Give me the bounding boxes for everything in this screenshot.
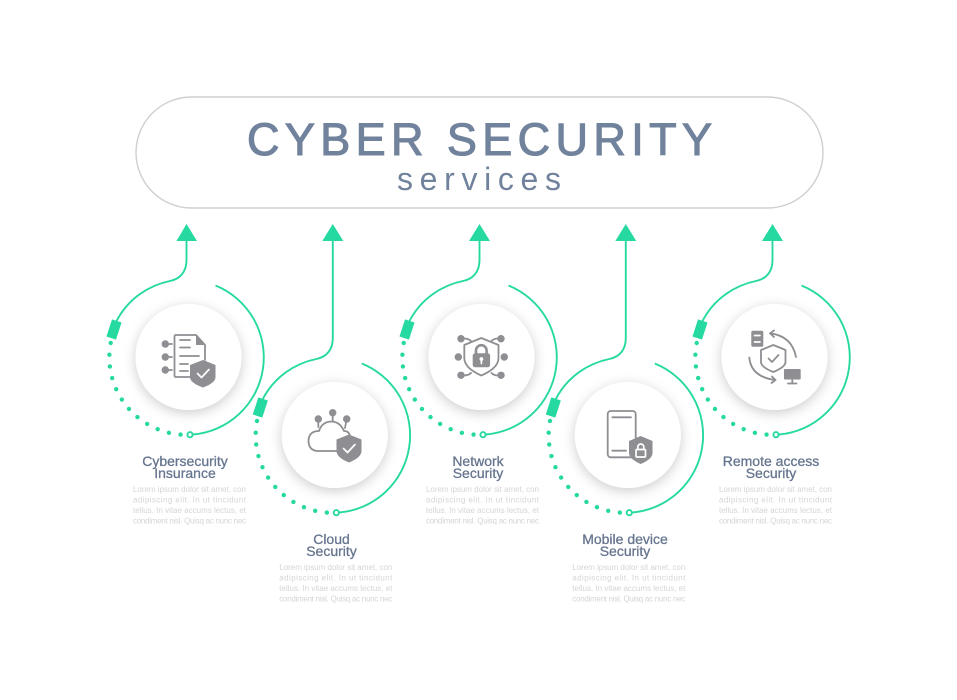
solid arc with end ring bbox=[334, 364, 410, 515]
icon disc bbox=[575, 382, 681, 488]
arrow with connector line bbox=[116, 224, 197, 322]
label: Network bbox=[452, 453, 505, 469]
description: Lorem ipsum dolor sit amet, con bbox=[572, 563, 685, 572]
description: condiment nisl. Quisq ac nunc nec bbox=[133, 516, 246, 526]
arrow with connector line bbox=[262, 224, 343, 400]
arrow with connector line bbox=[702, 224, 783, 322]
icon: phone with lock shield bbox=[608, 411, 652, 464]
description: Lorem ipsum dolor sit amet, con bbox=[719, 485, 832, 494]
description bbox=[719, 485, 833, 526]
icon disc bbox=[282, 382, 388, 488]
description bbox=[426, 485, 540, 526]
label line 2: Security bbox=[746, 465, 796, 481]
description bbox=[133, 485, 247, 526]
green marker bbox=[253, 397, 268, 418]
description: adipiscing elit. In ut tincidunt bbox=[719, 496, 833, 504]
solid arc with end ring bbox=[480, 286, 557, 437]
title: CYBER SECURITY bbox=[247, 114, 712, 165]
label: Cloud bbox=[313, 531, 350, 547]
step 2: cloud security bbox=[253, 224, 410, 604]
icon: shield with padlock and nodes bbox=[455, 335, 508, 379]
green marker bbox=[692, 319, 708, 340]
dotted arc bbox=[109, 343, 182, 435]
step 1: cybersecurity insurance bbox=[106, 224, 264, 526]
description: Lorem ipsum dolor sit amet, con bbox=[133, 485, 246, 494]
step 3: network security bbox=[399, 224, 557, 526]
step 4: mobile device security bbox=[546, 224, 703, 604]
dotted arc bbox=[402, 343, 475, 435]
green marker bbox=[399, 319, 415, 340]
icon: document with shield bbox=[162, 335, 216, 388]
description bbox=[572, 563, 686, 604]
label line 2: Security bbox=[306, 543, 357, 559]
icon: cloud with shield bbox=[308, 409, 362, 462]
label line 2: Insurance bbox=[154, 465, 216, 481]
description bbox=[279, 563, 393, 604]
header panel bbox=[136, 97, 823, 208]
label: Remote access bbox=[723, 453, 819, 469]
step 5: remote access security bbox=[692, 224, 850, 526]
arrow with connector line bbox=[409, 224, 490, 322]
description: tellus. In vitae accums lectus, et bbox=[279, 584, 393, 593]
icon disc bbox=[722, 304, 828, 410]
label: Mobile device bbox=[582, 531, 668, 547]
label line 2: Security bbox=[453, 465, 503, 481]
description: adipiscing elit. In ut tincidunt bbox=[572, 574, 686, 582]
label: Cybersecurity bbox=[142, 453, 228, 469]
description: tellus. In vitae accums lectus, et bbox=[572, 584, 686, 593]
subtitle: services bbox=[397, 161, 561, 197]
arrow with connector line bbox=[555, 224, 636, 400]
label line 2: Security bbox=[600, 543, 650, 559]
description: Lorem ipsum dolor sit amet, con bbox=[279, 563, 392, 572]
solid arc with end ring bbox=[627, 364, 703, 515]
description: tellus. In vitae accums lectus, et bbox=[426, 506, 540, 515]
description: adipiscing elit. In ut tincidunt bbox=[426, 496, 540, 504]
solid arc with end ring bbox=[187, 286, 264, 437]
dotted arc bbox=[695, 343, 768, 435]
solid arc with end ring bbox=[773, 286, 850, 437]
description: condiment nisl. Quisq ac nunc nec bbox=[719, 516, 832, 526]
description: condiment nisl. Quisq ac nunc nec bbox=[279, 594, 392, 604]
green marker bbox=[546, 397, 561, 418]
description: adipiscing elit. In ut tincidunt bbox=[279, 574, 393, 582]
description: tellus. In vitae accums lectus, et bbox=[719, 506, 833, 515]
description: tellus. In vitae accums lectus, et bbox=[133, 506, 247, 515]
dotted arc bbox=[256, 421, 328, 513]
dotted arc bbox=[549, 421, 621, 513]
description: Lorem ipsum dolor sit amet, con bbox=[426, 485, 539, 494]
icon: server, shield and monitor with sync arrows bbox=[749, 330, 801, 384]
description: adipiscing elit. In ut tincidunt bbox=[133, 496, 247, 504]
green marker bbox=[106, 319, 122, 340]
description: condiment nisl. Quisq ac nunc nec bbox=[572, 594, 685, 604]
icon disc bbox=[428, 304, 534, 410]
icon disc bbox=[136, 304, 242, 410]
description: condiment nisl. Quisq ac nunc nec bbox=[426, 516, 539, 526]
